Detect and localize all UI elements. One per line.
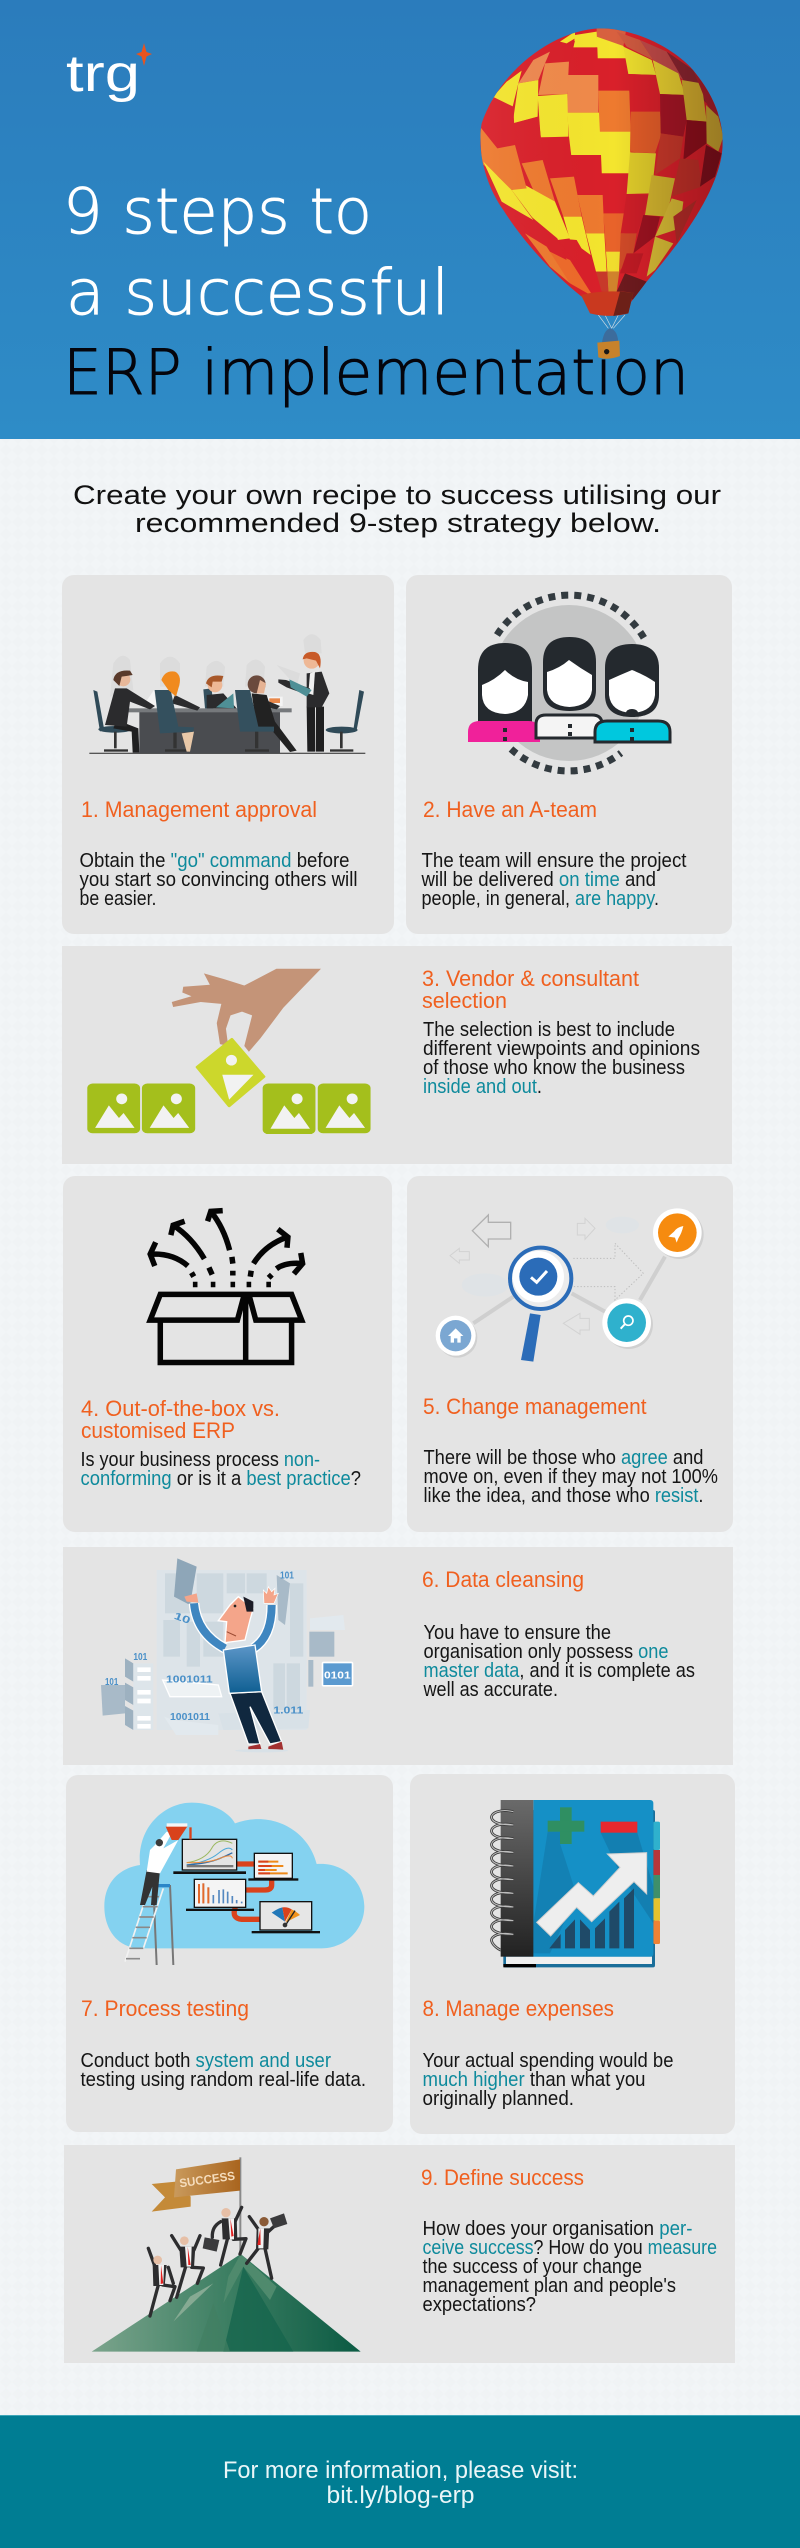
body: step 3: inside and out.	[423, 1076, 542, 1098]
panel: step 4 out-of-the-box vs customised	[63, 1176, 392, 1532]
footer band	[0, 2415, 800, 2548]
body: step 2: will be delivered on time and	[421, 869, 656, 891]
icon: man in data archive	[101, 1558, 353, 1752]
body: step 3: different viewpoints and opinions	[423, 1038, 700, 1060]
body: step 8	[422, 2050, 674, 2110]
logo: trg	[66, 45, 140, 103]
body: step 5: move on, even if they may not 100%	[424, 1466, 718, 1488]
heading: step 3	[422, 966, 640, 1013]
heading: step 6: 6. Data cleansing	[422, 1567, 584, 1592]
body: step 9: management plan and people's	[422, 2275, 676, 2297]
panel: step 3 vendor and consultant selection	[62, 946, 732, 1164]
body: step 8: originally planned.	[422, 2088, 574, 2110]
title	[63, 175, 689, 409]
footer text: bit.ly/blog-erp	[326, 2482, 474, 2509]
intro text	[73, 480, 721, 538]
panel: step 5 change management	[407, 1176, 733, 1532]
icon: man in data archive: 0101	[324, 1670, 351, 1681]
icon: man in data archive: 1001011	[170, 1712, 210, 1723]
body: step 1	[80, 850, 358, 910]
heading: step 5: 5. Change management	[423, 1394, 647, 1419]
body: step 6: You have to ensure the	[424, 1622, 611, 1644]
body: step 9: ceive success? How do you measure	[422, 2237, 717, 2259]
body: step 3: of those who know the business	[423, 1057, 685, 1079]
intro text: Create your own recipe to success utilising our	[73, 480, 721, 510]
body: step 5	[424, 1447, 718, 1507]
body: step 3	[423, 1019, 700, 1098]
heading: step 3: selection	[422, 988, 507, 1013]
header band	[0, 0, 800, 439]
footer text	[223, 2457, 578, 2509]
icon: man in data archive: 101	[280, 1570, 294, 1581]
icon: man in data archive: 10	[172, 1611, 192, 1627]
body: step 5: like the idea, and those who resist.	[424, 1485, 704, 1507]
body: step 5: There will be those who agree and	[424, 1447, 704, 1469]
intro text: recommended 9-step strategy below.	[135, 508, 661, 538]
heading: step 4	[81, 1396, 280, 1443]
heading: step 8: 8. Manage expenses	[422, 1996, 614, 2021]
panel: step 2 have an A-team	[406, 575, 732, 934]
heading: step 4: customised ERP	[81, 1418, 235, 1443]
panel: step 1 management approval	[62, 575, 394, 934]
title: a successful	[66, 256, 449, 329]
heading: step 7: 7. Process testing	[81, 1996, 249, 2021]
icon: hand picking an image tile	[87, 969, 371, 1134]
panel: step 7 process testing	[66, 1775, 393, 2132]
body: step 4	[80, 1449, 361, 1490]
body: step 2: The team will ensure the project	[422, 850, 687, 872]
body: step 3: The selection is best to include	[423, 1019, 675, 1041]
body: step 6	[423, 1622, 695, 1701]
body: step 2: people, in general, are happy.	[422, 888, 659, 910]
body: step 9: How does your organisation per-	[422, 2218, 692, 2240]
heading: step 1: 1. Management approval	[81, 797, 317, 822]
icon: notebook with rising arrow	[491, 1800, 660, 1967]
body: step 2	[421, 850, 687, 910]
icon: man in data archive: 101	[105, 1677, 119, 1688]
heading: step 9: 9. Define success	[421, 2165, 584, 2190]
heading: step 3: 3. Vendor & consultant	[422, 966, 640, 991]
body: step 6: well as accurate.	[423, 1679, 558, 1701]
panel: step 8 manage expenses	[410, 1774, 735, 2134]
body: step 1: Obtain the "go" command before	[80, 850, 350, 872]
hot air balloon	[480, 28, 723, 359]
title: ERP implementation	[63, 336, 689, 409]
body: step 1: you start so convincing others will	[80, 869, 358, 891]
body: step 9: expectations?	[422, 2294, 536, 2316]
heading: step 2: 2. Have an A-team	[423, 797, 597, 822]
body: step 1: be easier.	[80, 888, 156, 910]
body: step 8: Your actual spending would be	[422, 2050, 674, 2072]
footer text: For more information, please visit:	[223, 2457, 578, 2484]
icon: man in data archive: 1.011	[273, 1705, 304, 1716]
panel: step 9 define success	[64, 2145, 735, 2363]
logo	[66, 43, 152, 103]
body: step 6: master data, and it is complete as	[424, 1660, 695, 1682]
icon: cloud with laptops and ladder	[104, 1803, 364, 1965]
body: step 7: testing using random real-life data.	[80, 2069, 366, 2091]
body: step 7	[80, 2050, 366, 2091]
icon: man in data archive: 1001011	[166, 1675, 213, 1686]
icon: man in data archive: 101	[133, 1652, 148, 1663]
icon: open box with arrows	[150, 1211, 303, 1362]
title: 9 steps to	[63, 175, 372, 248]
panel: step 6 data cleansing	[63, 1547, 733, 1765]
icon: meeting around a table	[89, 634, 365, 754]
body: step 4: conforming or is it a best practice?	[80, 1468, 361, 1490]
body: step 9: the success of your change	[422, 2256, 642, 2278]
body: step 9	[422, 2218, 717, 2316]
icon: magnifier network	[436, 1208, 704, 1362]
icon: team of three faces	[468, 595, 670, 771]
body: step 8: much higher than what you	[422, 2069, 646, 2091]
page background	[0, 439, 800, 2415]
body: step 6: organisation only possess one	[424, 1641, 668, 1663]
body: step 4: Is your business process non-	[80, 1449, 320, 1471]
icon: team on mountain with flag	[92, 2157, 361, 2352]
body: step 7: Conduct both system and user	[80, 2050, 331, 2072]
heading: step 4: 4. Out-of-the-box vs.	[81, 1396, 280, 1421]
icon: team on mountain with flag: SUCCESS	[178, 2169, 236, 2190]
